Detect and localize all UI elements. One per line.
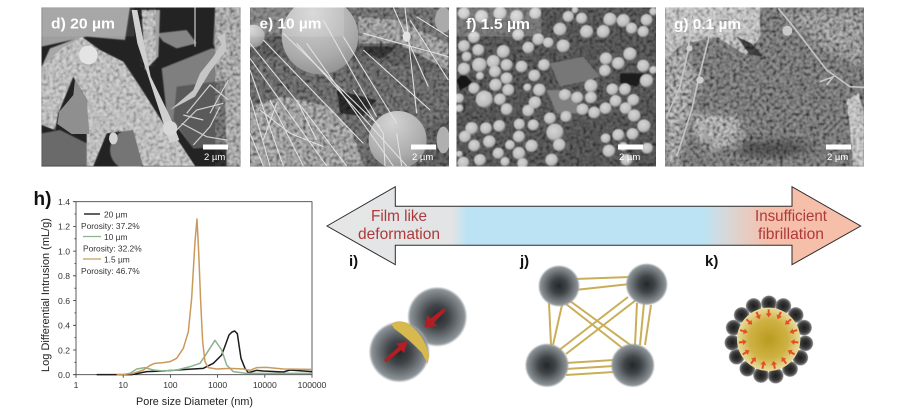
y axis tick labels: 0.2	[58, 345, 70, 355]
diagram i: film like deformation between two particles	[369, 287, 467, 382]
legend: 20 µm	[104, 210, 127, 220]
scale bar: panel d: 2 µm	[204, 152, 225, 163]
gold core	[737, 308, 800, 371]
curve: 1.5 µm	[117, 219, 312, 375]
x axis tick labels: 100000	[298, 380, 327, 390]
x axis tick labels: 1	[74, 380, 79, 390]
label overlay: d) 20 µm	[42, 8, 134, 36]
y axis tick labels: 0.8	[58, 271, 70, 281]
x axis tick labels: 10	[118, 380, 128, 390]
scale bar: panel f	[618, 144, 643, 163]
heading: h): h)	[34, 189, 51, 210]
plot frame and ticks	[73, 202, 312, 378]
panel d: SEM image 20 µm	[41, 7, 241, 170]
diagram j: particles linked by fibrils	[525, 264, 668, 387]
legend: 10 µm	[104, 232, 127, 242]
inward red arrows	[739, 309, 799, 369]
scale bar: panel g: 2 µm	[827, 152, 848, 163]
particles	[538, 266, 580, 306]
panel g: SEM image 0.1 µm	[665, 7, 864, 167]
y axis title: Log Differential Intrusion (mL/g)	[40, 218, 52, 372]
curve: 10 µm	[123, 340, 312, 375]
legend: Porosity: 46.7%	[81, 266, 140, 276]
chart: pore size distribution	[40, 197, 327, 408]
panel f: SEM image 1.5 µm	[454, 7, 657, 169]
y axis tick labels: 0.4	[58, 321, 70, 331]
label: i): i)	[349, 253, 358, 270]
y axis tick labels	[58, 197, 70, 380]
label: k): k)	[705, 253, 718, 270]
x axis tick labels: 100	[163, 380, 178, 390]
label overlay: d) 20 µm: d) 20 µm	[51, 16, 115, 32]
arrow text: film like deformation: deformation	[358, 226, 440, 243]
y axis tick labels: 0.6	[58, 296, 70, 306]
y axis tick labels: 1.2	[58, 222, 70, 232]
x axis tick labels	[74, 380, 327, 390]
y axis tick labels: 1.0	[58, 246, 70, 256]
legend: Porosity: 32.2%	[83, 244, 142, 254]
arrow text: insufficient fibrillation	[755, 208, 828, 243]
arrow text: insufficient fibrillation: fibrillation	[758, 226, 824, 243]
red compression arrows	[384, 308, 446, 362]
x axis tick labels: 10000	[253, 380, 277, 390]
label overlay: g) 0.1 µm: g) 0.1 µm	[674, 16, 741, 33]
label overlay: e) 10 µm: e) 10 µm	[260, 16, 322, 32]
y axis tick labels: 1.4	[58, 197, 70, 207]
gold film	[391, 321, 429, 363]
label overlay: f) 1.5 µm: f) 1.5 µm	[466, 16, 530, 33]
x axis tick labels: 1000	[208, 380, 227, 390]
legend: Porosity: 37.2%	[81, 221, 140, 231]
panel e: SEM image 10 µm	[250, 8, 449, 166]
label overlay: f) 1.5 µm	[456, 8, 542, 36]
legend: 1.5 µm	[104, 254, 130, 264]
y axis tick labels: 0.0	[58, 370, 70, 380]
legend	[81, 210, 142, 276]
scale bar: panel e	[411, 144, 436, 163]
scale bar: panel d	[203, 144, 228, 163]
x axis title: Pore size Diameter (nm)	[136, 396, 253, 408]
scale bar: panel e: 2 µm	[412, 152, 433, 163]
scale bar: panel g	[826, 144, 851, 163]
scale bar: panel f: 2 µm	[619, 152, 640, 163]
double arrow: deformation to fibrillation scale	[327, 187, 861, 265]
label overlay: e) 10 µm	[250, 8, 344, 36]
arrow text: insufficient fibrillation: Insufficient	[755, 208, 828, 225]
curve: 20 µm	[97, 331, 312, 375]
diagram k: core with surrounding particles and inward arrows	[724, 295, 813, 384]
arrow text: film like deformation	[358, 208, 440, 243]
label: j): j)	[519, 253, 529, 270]
arrow text: film like deformation: Film like	[371, 208, 427, 225]
label overlay: g) 0.1 µm	[665, 8, 758, 36]
gold fibrils	[549, 277, 651, 375]
